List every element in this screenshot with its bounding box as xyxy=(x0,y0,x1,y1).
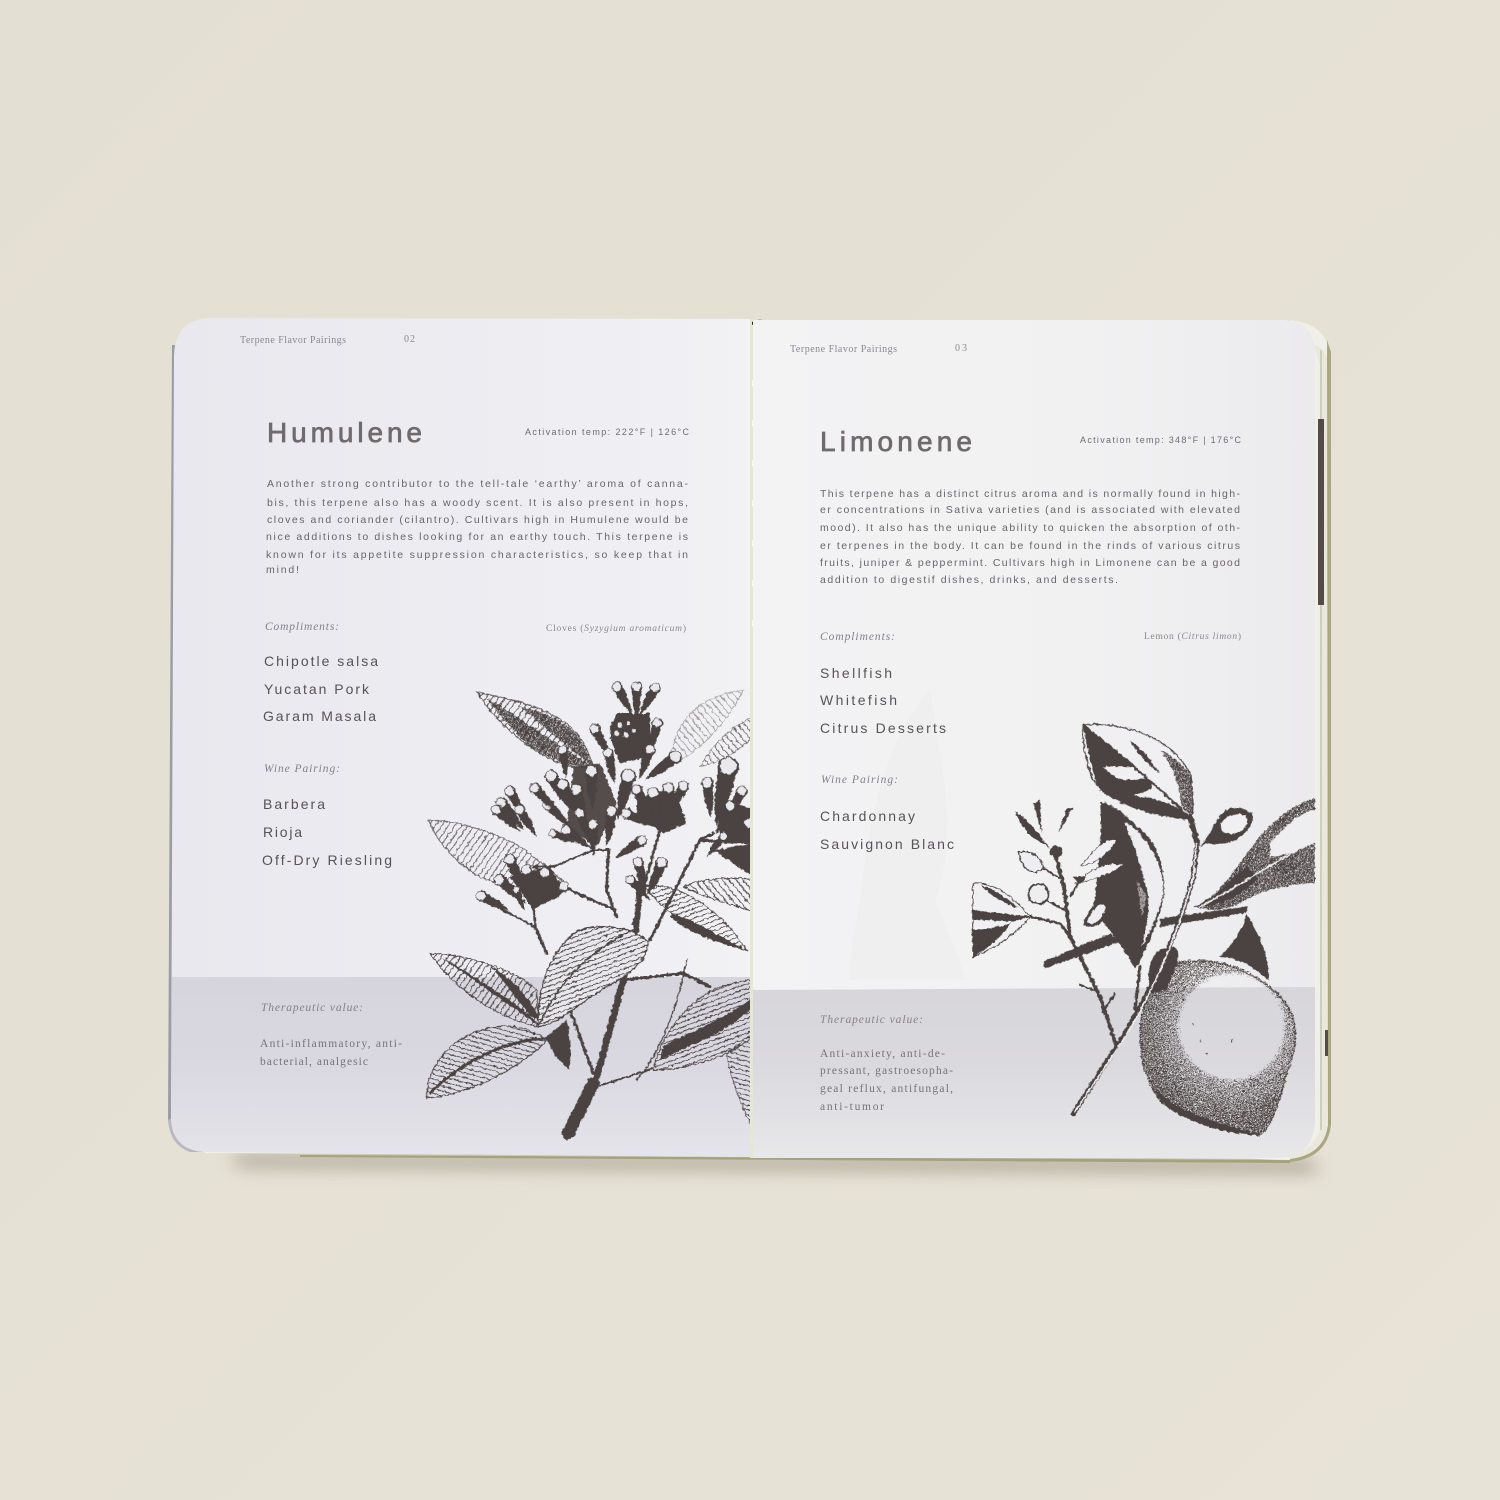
label: compliments left: Compliments: xyxy=(265,621,339,633)
gutter line and stitches xyxy=(750,319,763,1158)
description right: fruits, juniper & peppermint. Cultivars high in Limonene can be a good xyxy=(820,557,1240,569)
central buds xyxy=(610,767,638,822)
description left: known for its appetite suppression characteristics, so keep that in xyxy=(266,549,688,561)
compliments list left: Yucatan Pork xyxy=(264,681,370,697)
description left: bis, this terpene also has a woody scent. It is also present in hops, xyxy=(267,497,688,509)
left upper buds xyxy=(542,767,577,813)
wine list left: Barbera xyxy=(263,796,325,812)
therapeutic text right: pressant, gastroesopha- xyxy=(820,1065,953,1077)
therapeutic band left xyxy=(171,977,750,1157)
flowers and buds xyxy=(1015,800,1123,925)
running header right xyxy=(790,343,967,355)
label: compliments right: Compliments: xyxy=(820,631,895,643)
running header left: Terpene Flavor Pairings xyxy=(240,335,346,346)
running header right: 03 xyxy=(955,343,967,354)
top leaf xyxy=(1083,724,1193,820)
description right xyxy=(820,488,1240,586)
therapeutic band right xyxy=(753,987,1315,1158)
label: wine pairing left: Wine Pairing: xyxy=(264,763,340,775)
description left: nice additions to dishes looking for an earthy touch. This terpene is xyxy=(266,531,688,543)
bud xyxy=(1200,808,1254,847)
leaves behind xyxy=(427,690,753,1130)
therapeutic text right: anti-tumor xyxy=(820,1101,884,1113)
heading: Humulene: Humulene xyxy=(267,417,422,448)
left page: Humulene xyxy=(171,318,756,1157)
wine list right: Chardonnay xyxy=(820,808,915,824)
lower-left buds xyxy=(491,871,530,908)
middle buds xyxy=(642,855,670,898)
branch xyxy=(1043,907,1247,968)
compliments list left: Chipotle salsa xyxy=(264,653,378,669)
running header left xyxy=(240,334,415,346)
bookmark ribbon xyxy=(1318,419,1324,605)
left leaf xyxy=(973,883,1030,957)
running header left: 02 xyxy=(404,334,415,345)
description right: er terpenes in the body. It can be found in the rinds of various citrus xyxy=(820,540,1240,552)
activation temperature right: Activation temp: 348°F | 176°C xyxy=(1080,435,1242,445)
plant name: cloves: Cloves (Syzygium aromaticum) xyxy=(546,623,686,634)
therapeutic text left: bacterial, analgesic xyxy=(260,1056,368,1068)
therapeutic text right: Anti-anxiety, anti-de- xyxy=(820,1048,945,1060)
right page: Limonene xyxy=(753,320,1315,1158)
description left: mind! xyxy=(266,564,299,576)
compliments list right xyxy=(820,665,946,736)
label: therapeutic value left: Therapeutic value: xyxy=(261,1002,363,1014)
description right: mood). It also has the unique ability to quicken the absorption of oth- xyxy=(820,522,1240,534)
description right: er concentrations in Sativa varieties (and is associated with elevated xyxy=(820,504,1240,516)
compliments list left: Garam Masala xyxy=(263,708,376,724)
running header right: Terpene Flavor Pairings xyxy=(790,344,897,355)
main stems xyxy=(1030,817,1197,1113)
stems xyxy=(483,830,753,1133)
book shadow xyxy=(230,1155,1320,1172)
activation temperature left: Activation temp: 222°F | 126°C xyxy=(525,427,690,437)
right buds xyxy=(705,755,741,828)
therapeutic text right: geal reflux, antifungal, xyxy=(820,1083,953,1095)
wine list left: Rioja xyxy=(263,824,302,840)
foreground central leaf xyxy=(538,927,648,1027)
heading: Limonene: Limonene xyxy=(820,426,972,457)
right leaf xyxy=(1193,798,1315,910)
wine list right: Sauvignon Blanc xyxy=(820,836,954,852)
calyx behind lemon xyxy=(1148,913,1269,993)
illustration: lemon branch xyxy=(973,724,1315,1135)
description right: addition to digestif dishes, drinks, and desserts. xyxy=(820,574,1118,586)
faint show-through plant xyxy=(850,690,965,980)
label: therapeutic value right: Therapeutic value: xyxy=(820,1014,923,1026)
flower clusters xyxy=(474,680,756,916)
illustration: clove branch xyxy=(427,680,756,1133)
description right: This terpene has a distinct citrus aroma and is normally found in high- xyxy=(820,488,1240,500)
description left: Another strong contributor to the tell-tale ‘earthy’ aroma of canna- xyxy=(267,478,688,490)
dark back leaf xyxy=(1093,802,1164,968)
therapeutic text left xyxy=(260,1038,402,1068)
central flower head xyxy=(610,715,638,743)
compliments list right: Shellfish xyxy=(820,665,892,681)
compliments list right: Citrus Desserts xyxy=(820,720,946,736)
compliments list right: Whitefish xyxy=(820,692,897,708)
therapeutic text right xyxy=(820,1048,953,1113)
lemon xyxy=(1140,961,1295,1135)
compliments list left xyxy=(263,653,378,724)
wine list right xyxy=(820,808,954,852)
label: wine pairing right: Wine Pairing: xyxy=(821,774,898,786)
book cover and page block xyxy=(168,320,1331,1163)
wine list left: Off-Dry Riesling xyxy=(262,852,392,868)
plant name: lemon: Lemon (Citrus limon) xyxy=(1144,631,1241,642)
top buds xyxy=(610,680,638,718)
description left: cloves and coriander (cilantro). Cultivars high in Humulene would be xyxy=(267,514,688,526)
description left xyxy=(266,478,688,576)
wine list left xyxy=(262,796,392,868)
therapeutic text left: Anti-inflammatory, anti- xyxy=(260,1038,402,1050)
